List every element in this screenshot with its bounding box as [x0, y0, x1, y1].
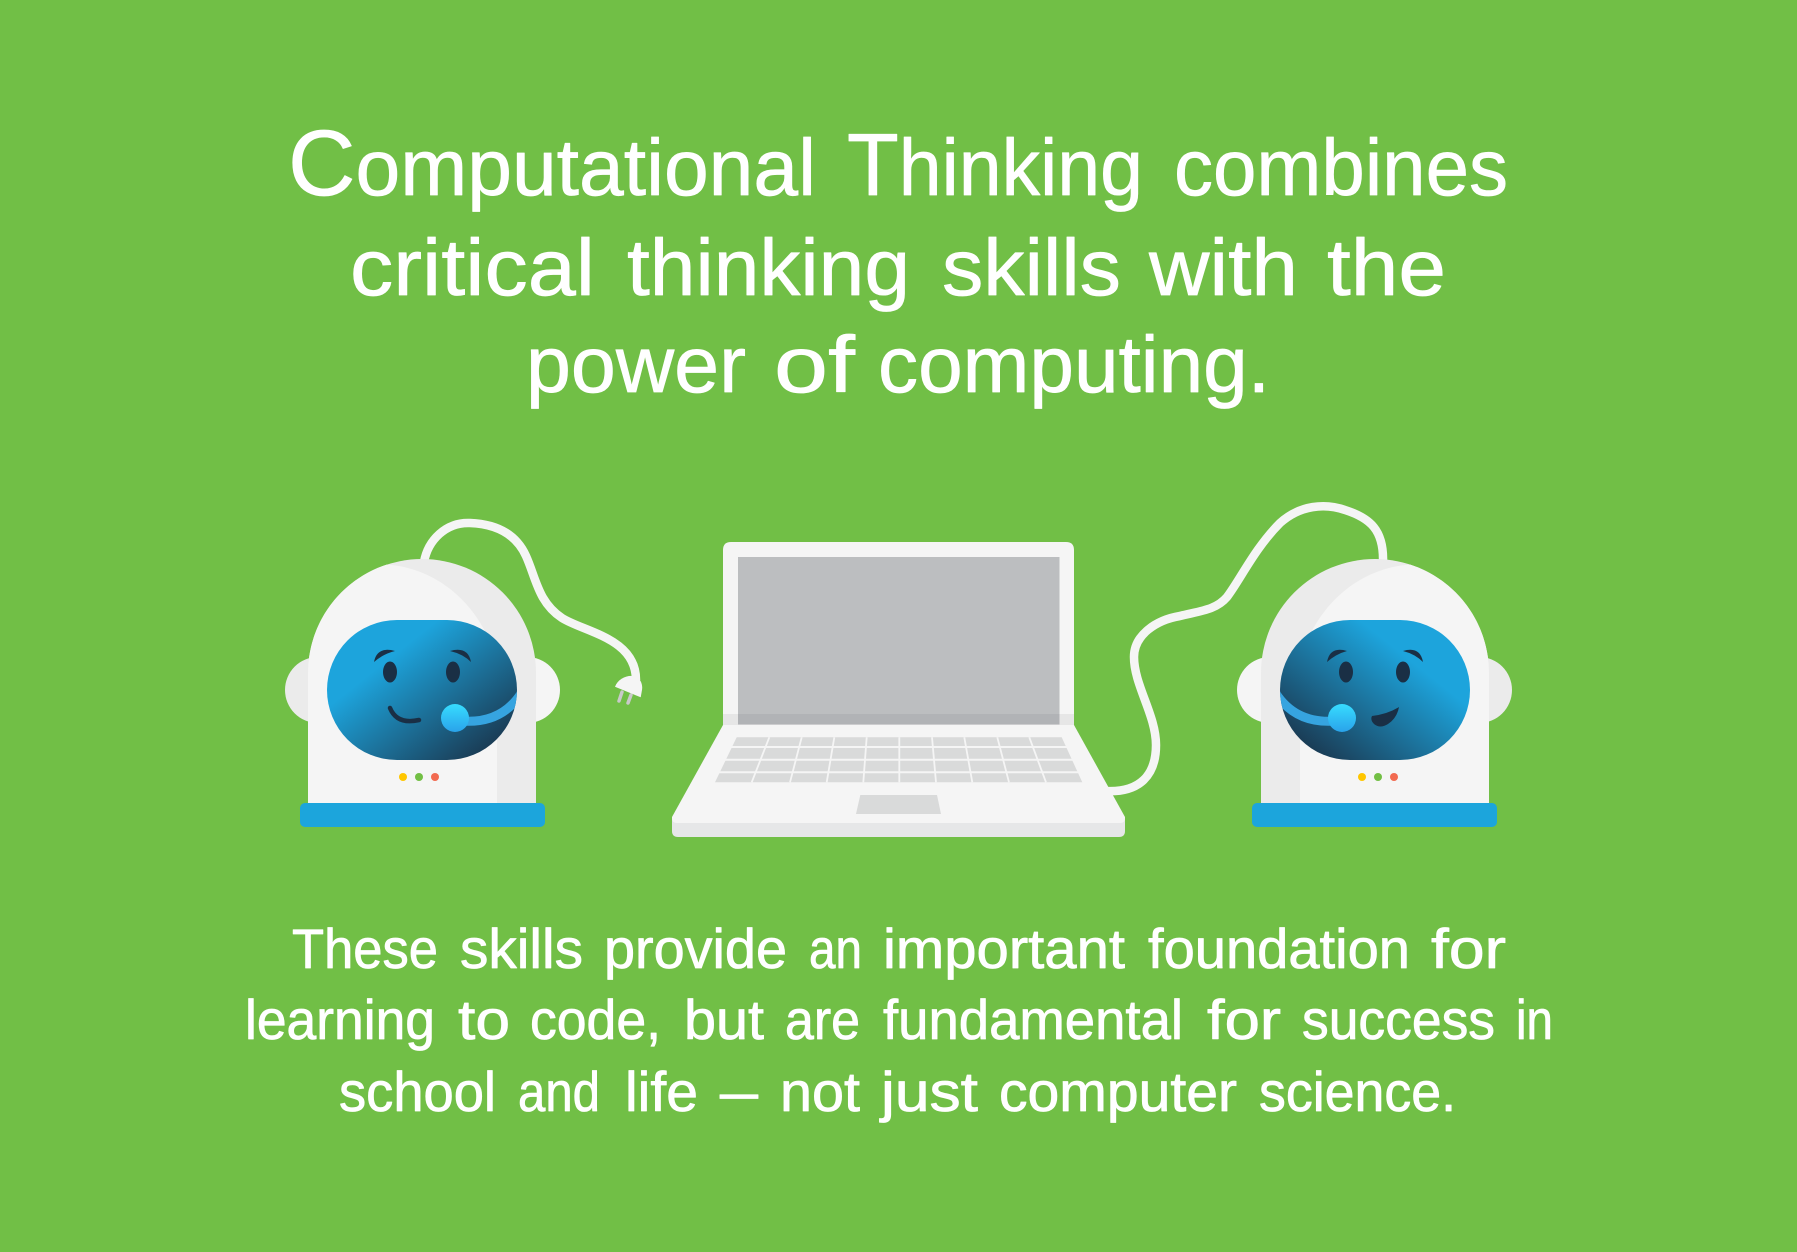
- laptop: [672, 542, 1125, 837]
- body text: –: [720, 1060, 759, 1123]
- headset arm: [462, 692, 522, 721]
- headset arm: [1275, 692, 1335, 721]
- body text: school: [339, 1060, 496, 1123]
- eyebrows: [1327, 650, 1423, 662]
- visor: [327, 620, 517, 760]
- icon: plug: [615, 676, 642, 703]
- body text: and: [518, 1060, 600, 1123]
- body text: for: [1431, 917, 1506, 980]
- body text: These: [292, 917, 438, 980]
- body text: fundamental: [883, 988, 1183, 1051]
- laptop deck: [672, 725, 1125, 823]
- helmet shell: [1261, 559, 1489, 803]
- body text: success: [1302, 988, 1495, 1051]
- left ear: [1237, 657, 1303, 723]
- helmet shell: [308, 559, 536, 803]
- open smile: [1371, 707, 1399, 726]
- laptop lid: [723, 542, 1074, 725]
- helmet highlight: [308, 564, 497, 803]
- body text: not: [780, 1060, 860, 1123]
- right robot: [1105, 506, 1512, 827]
- microphone: [1328, 704, 1356, 732]
- left ear: [285, 657, 351, 723]
- body text: for: [1207, 988, 1281, 1051]
- title: skills: [942, 223, 1121, 312]
- right ear: [1446, 657, 1512, 723]
- eyes: [383, 662, 460, 682]
- title: Computational: [288, 111, 816, 215]
- title: critical: [350, 223, 595, 312]
- body text: but: [684, 988, 764, 1051]
- title: power: [526, 320, 746, 409]
- title: [288, 111, 1508, 409]
- left robot: [285, 523, 642, 827]
- title: the: [1327, 223, 1446, 312]
- title: thinking: [627, 223, 910, 312]
- microphone: [441, 704, 469, 732]
- keyboard: [715, 737, 1082, 782]
- body text: skills: [460, 917, 583, 980]
- left robot cord: [424, 523, 636, 680]
- laptop base side: [672, 817, 1125, 837]
- eyes: [1339, 662, 1410, 682]
- body text: science.: [1259, 1060, 1456, 1123]
- title: with: [1148, 223, 1298, 312]
- eyebrows: [374, 650, 471, 662]
- body text: are: [785, 988, 860, 1051]
- smile: [390, 708, 419, 721]
- body text: important: [883, 917, 1125, 980]
- title: of: [774, 320, 856, 409]
- right robot cord: [1105, 506, 1383, 791]
- status lights: [399, 773, 439, 781]
- visor: [1280, 620, 1470, 760]
- body text: just: [879, 1060, 978, 1123]
- helmet highlight: [1300, 564, 1489, 803]
- right ear: [494, 657, 560, 723]
- title: computing.: [878, 320, 1270, 409]
- body text: foundation: [1148, 917, 1410, 980]
- trackpad: [856, 795, 941, 814]
- body text: learning: [245, 988, 435, 1051]
- body text: in: [1516, 988, 1553, 1051]
- base: [300, 803, 545, 827]
- screen: [738, 557, 1060, 724]
- body text: code,: [530, 988, 661, 1051]
- title: Thinking: [847, 115, 1143, 214]
- body text: life: [625, 1060, 698, 1123]
- body text: provide: [604, 917, 787, 980]
- body text: an: [809, 917, 862, 980]
- body text: computer: [999, 1060, 1237, 1123]
- status lights: [1358, 773, 1398, 781]
- body text: to: [458, 988, 510, 1051]
- base: [1252, 803, 1497, 827]
- title: combines: [1174, 123, 1508, 212]
- body text: [245, 917, 1553, 1123]
- screen shade: [738, 714, 1060, 724]
- hinge shade: [723, 714, 1074, 725]
